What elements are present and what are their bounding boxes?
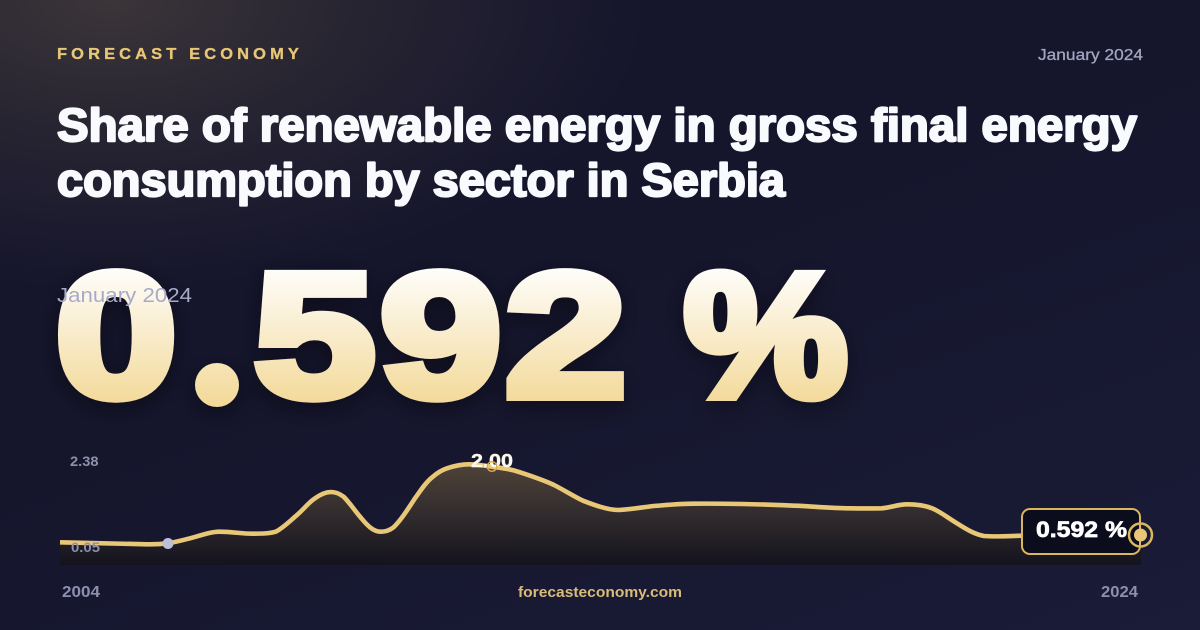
source url: forecasteconomy.com	[518, 584, 682, 601]
title: consumption by sector in Serbia	[57, 154, 785, 206]
area fill	[60, 464, 1141, 565]
x axis end label: 2024	[1101, 584, 1138, 601]
date label top right: January 2024	[1038, 47, 1143, 64]
big value: %	[684, 238, 847, 434]
axis max label: 2.38	[70, 453, 99, 469]
ghost date label over value: January 2024	[57, 284, 192, 307]
title	[57, 99, 1137, 206]
peak value label: 2.00	[471, 451, 513, 471]
brand label: FORECAST ECONOMY	[57, 46, 303, 63]
axis min label: 0.05	[71, 539, 100, 555]
title: Share of renewable energy in gross final energy	[57, 99, 1137, 151]
peak marker	[487, 462, 497, 471]
latest point marker	[1129, 524, 1152, 546]
area chart	[60, 451, 1152, 565]
start point marker	[162, 538, 174, 549]
x axis start label: 2004	[62, 584, 100, 601]
latest value callout: 0.592 %	[1036, 517, 1127, 542]
latest value callout	[1022, 509, 1140, 554]
big value: 0.592	[56, 238, 626, 434]
line series	[60, 464, 1141, 544]
